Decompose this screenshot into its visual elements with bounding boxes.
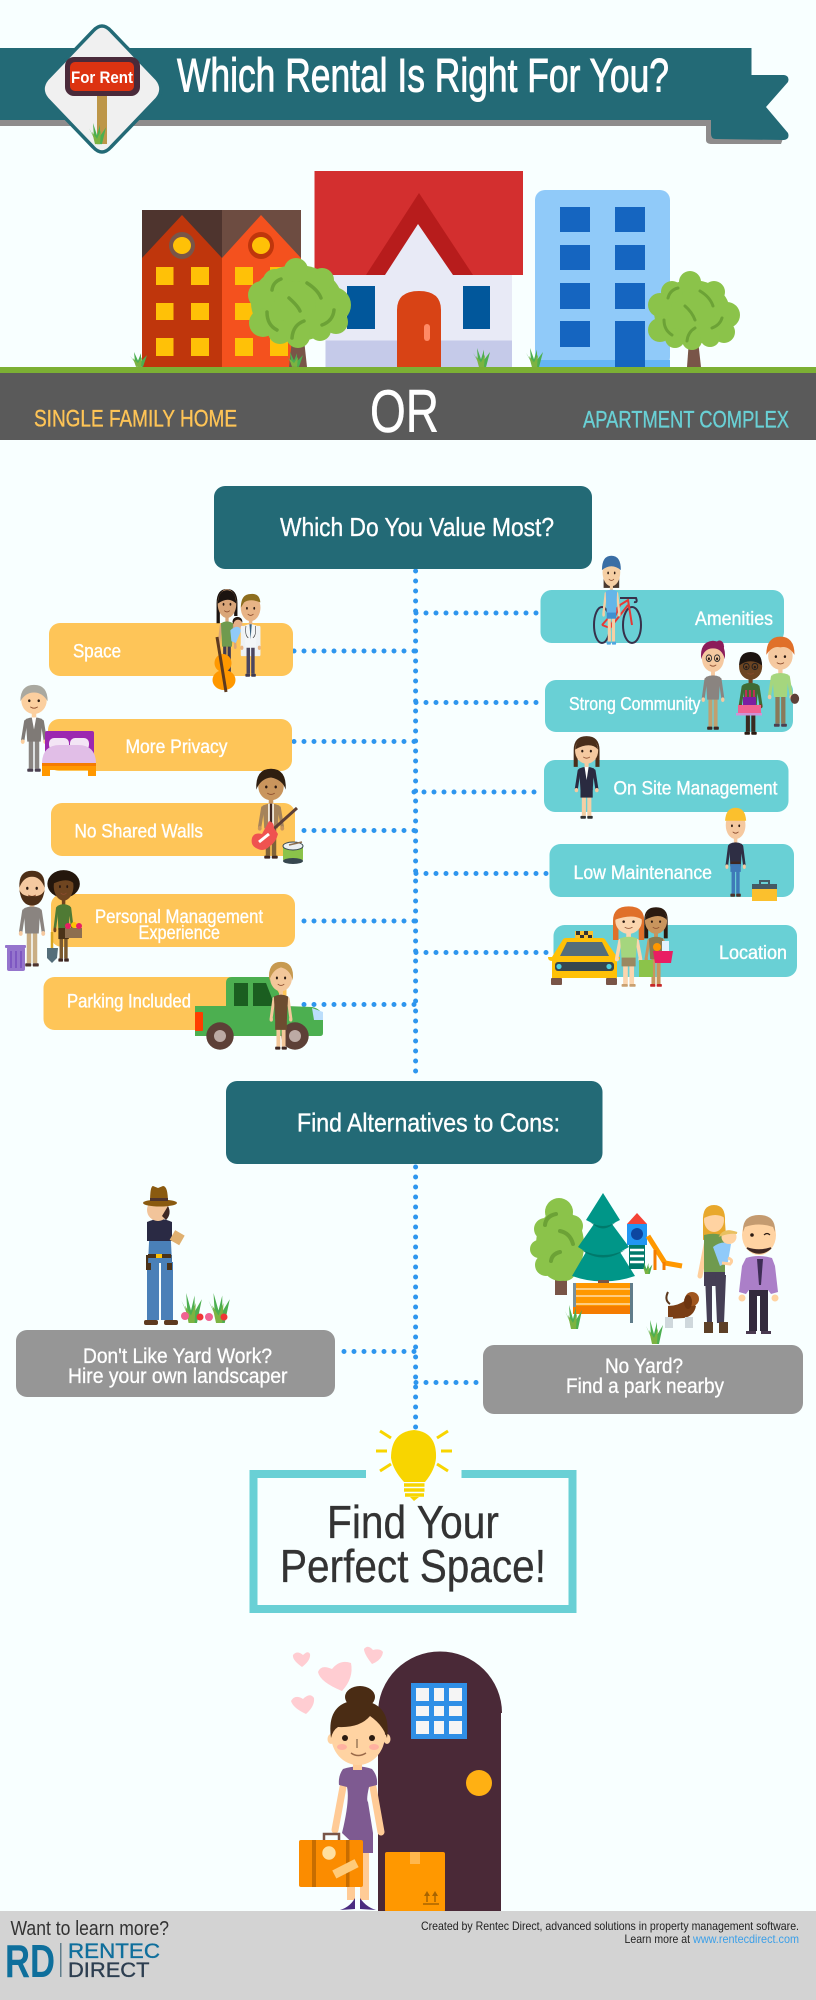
option: personal management experience: [5, 870, 295, 971]
icon: suitcase: [299, 1834, 363, 1887]
footer: www.rentecdirect.com: [692, 1932, 799, 1946]
callout: no yard: [483, 1345, 803, 1414]
icon: landscaper: [143, 1186, 185, 1325]
option: on site management: On Site Management: [614, 778, 778, 800]
icon: property manager: [574, 736, 600, 819]
single family home label: SINGLE FAMILY HOME: [34, 406, 237, 432]
icon: woman: [269, 962, 293, 1050]
rentec direct logo: DIRECT: [68, 1959, 150, 1982]
heading: find alternatives to cons: [226, 1081, 602, 1164]
icon: toolbox: [752, 881, 777, 901]
option: space: Space: [73, 642, 121, 662]
icon: guitar: [252, 808, 297, 850]
option: parking included: [44, 962, 323, 1050]
dotted connectors: [292, 571, 553, 1429]
footer: Learn more at: [624, 1932, 691, 1946]
icon: flowers and grass: [181, 1293, 230, 1323]
option: parking included: Parking Included: [67, 992, 191, 1012]
callout: yard work: Don't Like Yard Work?: [83, 1345, 272, 1368]
icon: father: [738, 1215, 778, 1334]
rentec direct logo: RD: [5, 1935, 55, 1987]
icon: woman at door: [328, 1686, 390, 1910]
option: no shared walls: [51, 769, 303, 864]
icon: maintenance worker: [725, 808, 746, 897]
icon: dog: [665, 1292, 699, 1328]
icon: bicycle: [594, 598, 641, 643]
option: space: [49, 589, 293, 692]
icon: guitarist: [256, 769, 286, 859]
callout: yard work: Hire your own landscaper: [68, 1365, 288, 1388]
callout: no yard: Find a park nearby: [566, 1375, 724, 1398]
icon: cyclist: [602, 556, 621, 645]
icon: flower box: [65, 922, 82, 938]
icon: two women shopping: [613, 906, 673, 987]
icon: man with drink: [766, 637, 799, 727]
icon: shovel: [47, 932, 58, 963]
heading: find alternatives to cons: Find Alternatives to Cons:: [297, 1108, 560, 1138]
icon: doctor: [240, 594, 261, 677]
option: more privacy: [20, 685, 292, 776]
icon: light bulb: [366, 1430, 462, 1501]
footer: [0, 1911, 816, 2000]
closing box: Find Your: [327, 1496, 499, 1548]
option: amenities: Amenities: [695, 609, 773, 630]
icon: hearts: [291, 1647, 383, 1714]
townhouses: [142, 210, 301, 367]
icon: trash can: [5, 945, 26, 971]
option: strong community: Strong Community: [569, 694, 700, 714]
grass tufts: [130, 348, 543, 367]
for rent sign: For Rent: [71, 68, 133, 87]
option: low maintenance: [550, 808, 794, 901]
option: on site management: [544, 736, 788, 819]
apartment building: [535, 190, 670, 367]
heading: which do you value most: Which Do You Value Most?: [280, 512, 554, 542]
icon: cardboard box: [385, 1852, 445, 1912]
heading: which do you value most: [214, 486, 592, 569]
rentec direct logo: [5, 1935, 160, 1987]
ground strip: [0, 367, 816, 373]
option: more privacy: More Privacy: [126, 737, 228, 758]
icon: door: [378, 1652, 502, 1911]
callout: no yard: No Yard?: [605, 1355, 683, 1378]
rentec direct logo: RENTEC: [68, 1940, 160, 1963]
icon: cake: [736, 690, 762, 716]
tree right: [648, 271, 740, 367]
icon: bearded man: [19, 871, 45, 967]
icon: taxi: [548, 931, 620, 985]
icon: woman with flowers: [47, 870, 80, 962]
option: low maintenance: Low Maintenance: [574, 863, 712, 884]
icon: park scene: [530, 1193, 682, 1344]
icon: older man: [20, 685, 48, 772]
closing box: Perfect Space!: [280, 1540, 546, 1592]
icon: man with cake: [739, 652, 763, 735]
closing box: [254, 1474, 572, 1609]
tree left: [248, 258, 351, 367]
icon: mother and baby: [217, 589, 242, 678]
single family house: [314, 171, 523, 367]
icon: woman with glasses: [701, 641, 725, 730]
learn more text: Want to learn more?: [10, 1918, 169, 1940]
icon: drum: [283, 842, 303, 864]
option: amenities: [540, 556, 784, 645]
option: location: [548, 906, 797, 987]
option: personal management experience: Personal Management: [95, 907, 264, 928]
option: location: Location: [719, 943, 787, 964]
option: strong community: [545, 637, 799, 735]
icon: mother with baby: [700, 1205, 737, 1333]
callout: yard work: [16, 1330, 335, 1397]
option: personal management experience: Experience: [138, 923, 220, 944]
title text: Which Rental Is Right For You?: [177, 48, 669, 102]
icon: cello: [212, 637, 236, 692]
for rent sign: [43, 26, 161, 152]
icon: bed: [42, 731, 96, 776]
or label: OR: [370, 378, 439, 445]
option: no shared walls: No Shared Walls: [74, 822, 203, 842]
icon: truck: [195, 977, 323, 1050]
title banner: [0, 48, 788, 144]
road band: [0, 373, 816, 445]
